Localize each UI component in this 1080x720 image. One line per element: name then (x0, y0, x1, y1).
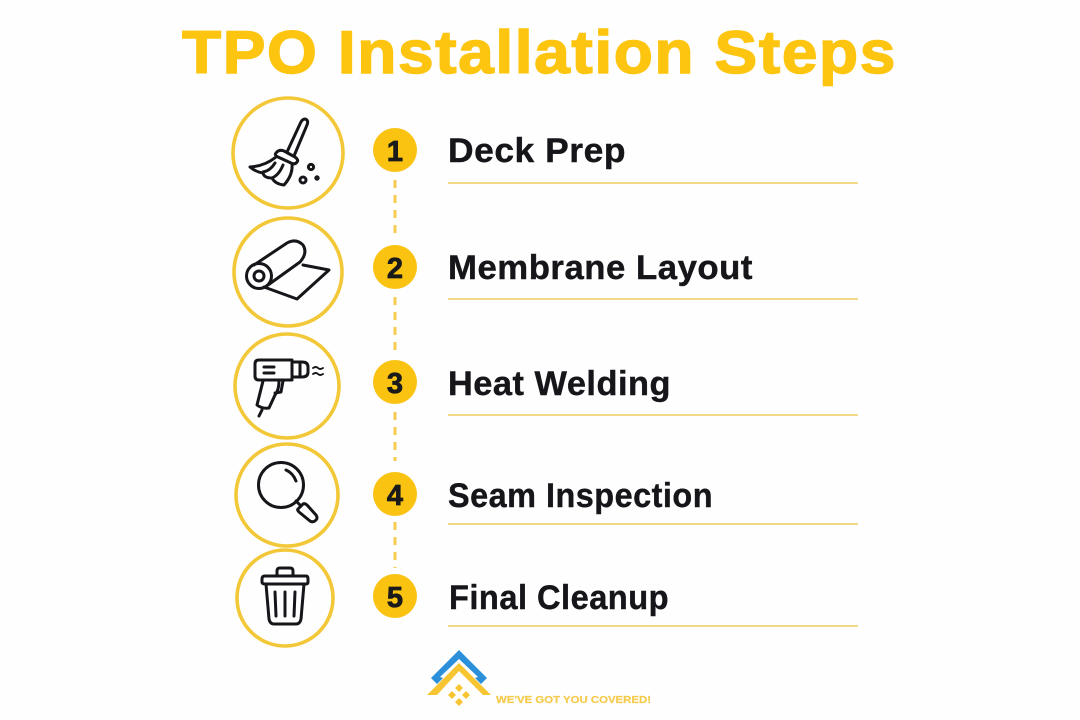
number badge 5: 5 (387, 582, 403, 614)
title: TPO Installation Steps (182, 19, 897, 86)
step 4 (236, 444, 858, 546)
number badge 5 (373, 574, 417, 618)
number badge 4 (373, 472, 417, 516)
label: Seam Inspection: Seam Inspection (448, 477, 713, 515)
number badge 1: 1 (387, 136, 403, 168)
icon: trash can (237, 550, 333, 646)
step 2 (234, 218, 858, 326)
icon: broom (233, 98, 343, 208)
number badge 4: 4 (387, 480, 403, 512)
label: Heat Welding: Heat Welding (448, 365, 671, 403)
icon: heat gun (235, 334, 339, 438)
step 1 (233, 98, 858, 208)
number badge 3 (373, 360, 417, 404)
label: Membrane Layout: Membrane Layout (448, 249, 753, 287)
label: Final Cleanup: Final Cleanup (449, 579, 669, 617)
icon: magnifying glass (236, 444, 338, 546)
logo (427, 650, 651, 706)
icon: house roof logo (427, 650, 491, 706)
number badge 3: 3 (387, 368, 403, 400)
step 3 (235, 334, 858, 438)
number badge 2 (373, 245, 417, 289)
number badge 1 (373, 128, 417, 172)
step connector dashes (394, 180, 396, 568)
label: Deck Prep: Deck Prep (448, 132, 626, 170)
tagline: WE'VE GOT YOU COVERED! (496, 695, 651, 706)
number badge 2: 2 (387, 253, 403, 285)
step 5 (237, 550, 858, 646)
icon: membrane roll (234, 218, 342, 326)
